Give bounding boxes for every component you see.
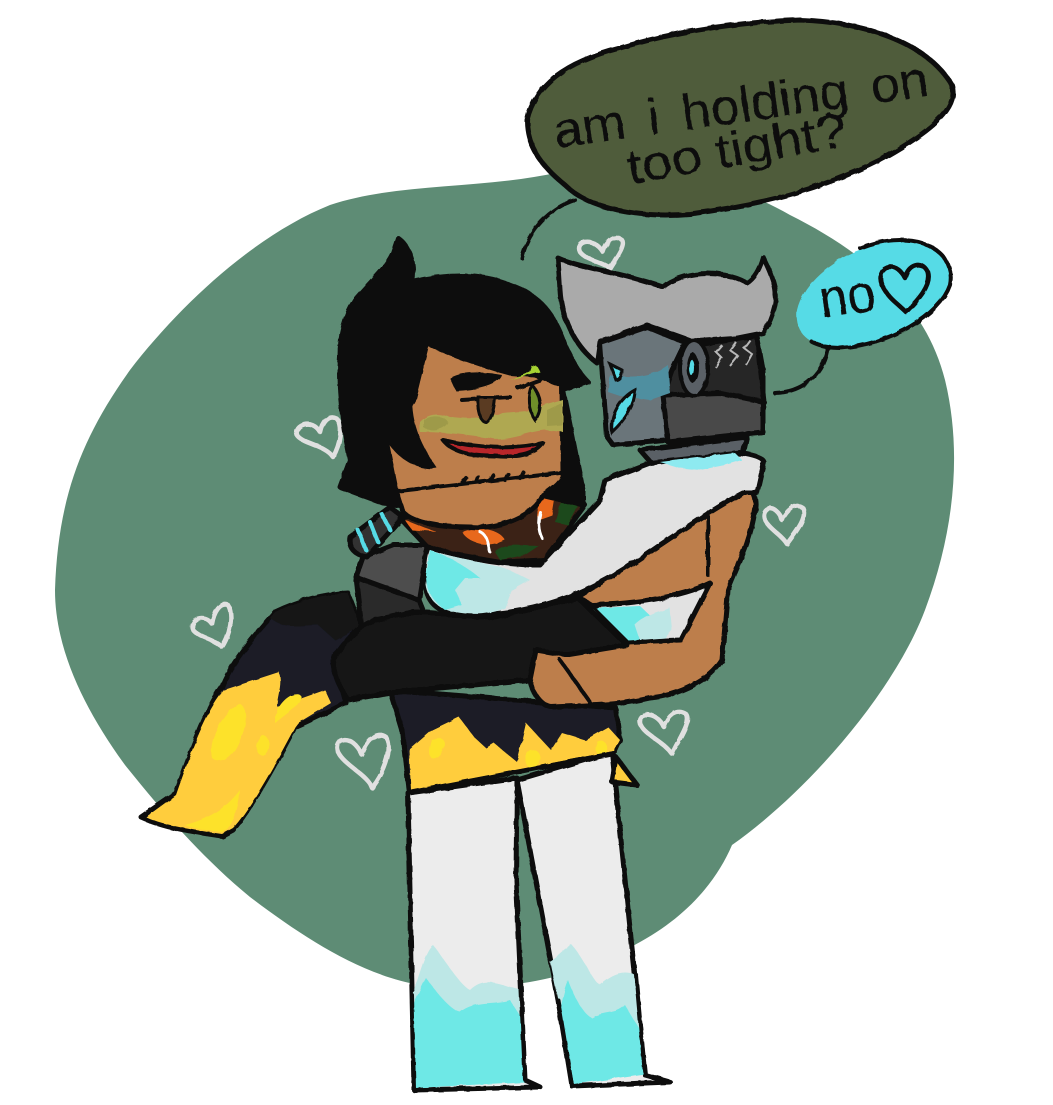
strap xyxy=(663,336,764,402)
speech bubble: am i holding on too tight: too tight? xyxy=(623,104,851,195)
right eye and green scar xyxy=(510,360,540,420)
chin line and stubble xyxy=(390,472,560,492)
hero black arm xyxy=(333,598,627,700)
sidekick thigh xyxy=(593,583,710,642)
mouth xyxy=(443,440,543,457)
hero hair front xyxy=(345,280,588,500)
cyan eyes xyxy=(610,364,635,432)
coat lower body xyxy=(390,690,637,793)
shoulder cyan xyxy=(660,453,742,470)
legs xyxy=(408,752,670,1090)
green background blob xyxy=(55,170,954,987)
speech bubble: am i holding on too tight: am i holding on xyxy=(550,51,932,159)
silver hair xyxy=(558,257,776,363)
speech bubble: am i holding on too tight xyxy=(522,20,953,258)
coat tail xyxy=(141,593,362,836)
blue visor stain xyxy=(608,365,670,400)
speech bubble: no heart xyxy=(775,240,951,393)
left eye and brow xyxy=(450,372,510,422)
speech bubble: no heart: no xyxy=(815,263,879,330)
torso and shoulder xyxy=(356,545,428,630)
scarf xyxy=(400,485,585,562)
strap lightning marks xyxy=(716,340,752,368)
back cylinder xyxy=(350,507,403,557)
right leg xyxy=(517,752,670,1086)
left leg xyxy=(408,778,540,1090)
helmet face xyxy=(600,327,763,445)
hearts xyxy=(192,238,804,788)
hero head xyxy=(387,343,563,527)
hero hair back xyxy=(339,238,588,505)
drawing with rough pencil edge xyxy=(141,20,953,1090)
sidekick head and hair xyxy=(558,257,776,465)
sleeve cyan ombre xyxy=(426,550,530,614)
sidekick white sleeve xyxy=(424,453,764,615)
helmet lower dark xyxy=(663,392,763,442)
sidekick brown torso and hand xyxy=(528,487,756,707)
face paint band xyxy=(420,400,563,439)
neck xyxy=(640,437,747,465)
side ring xyxy=(680,340,708,396)
